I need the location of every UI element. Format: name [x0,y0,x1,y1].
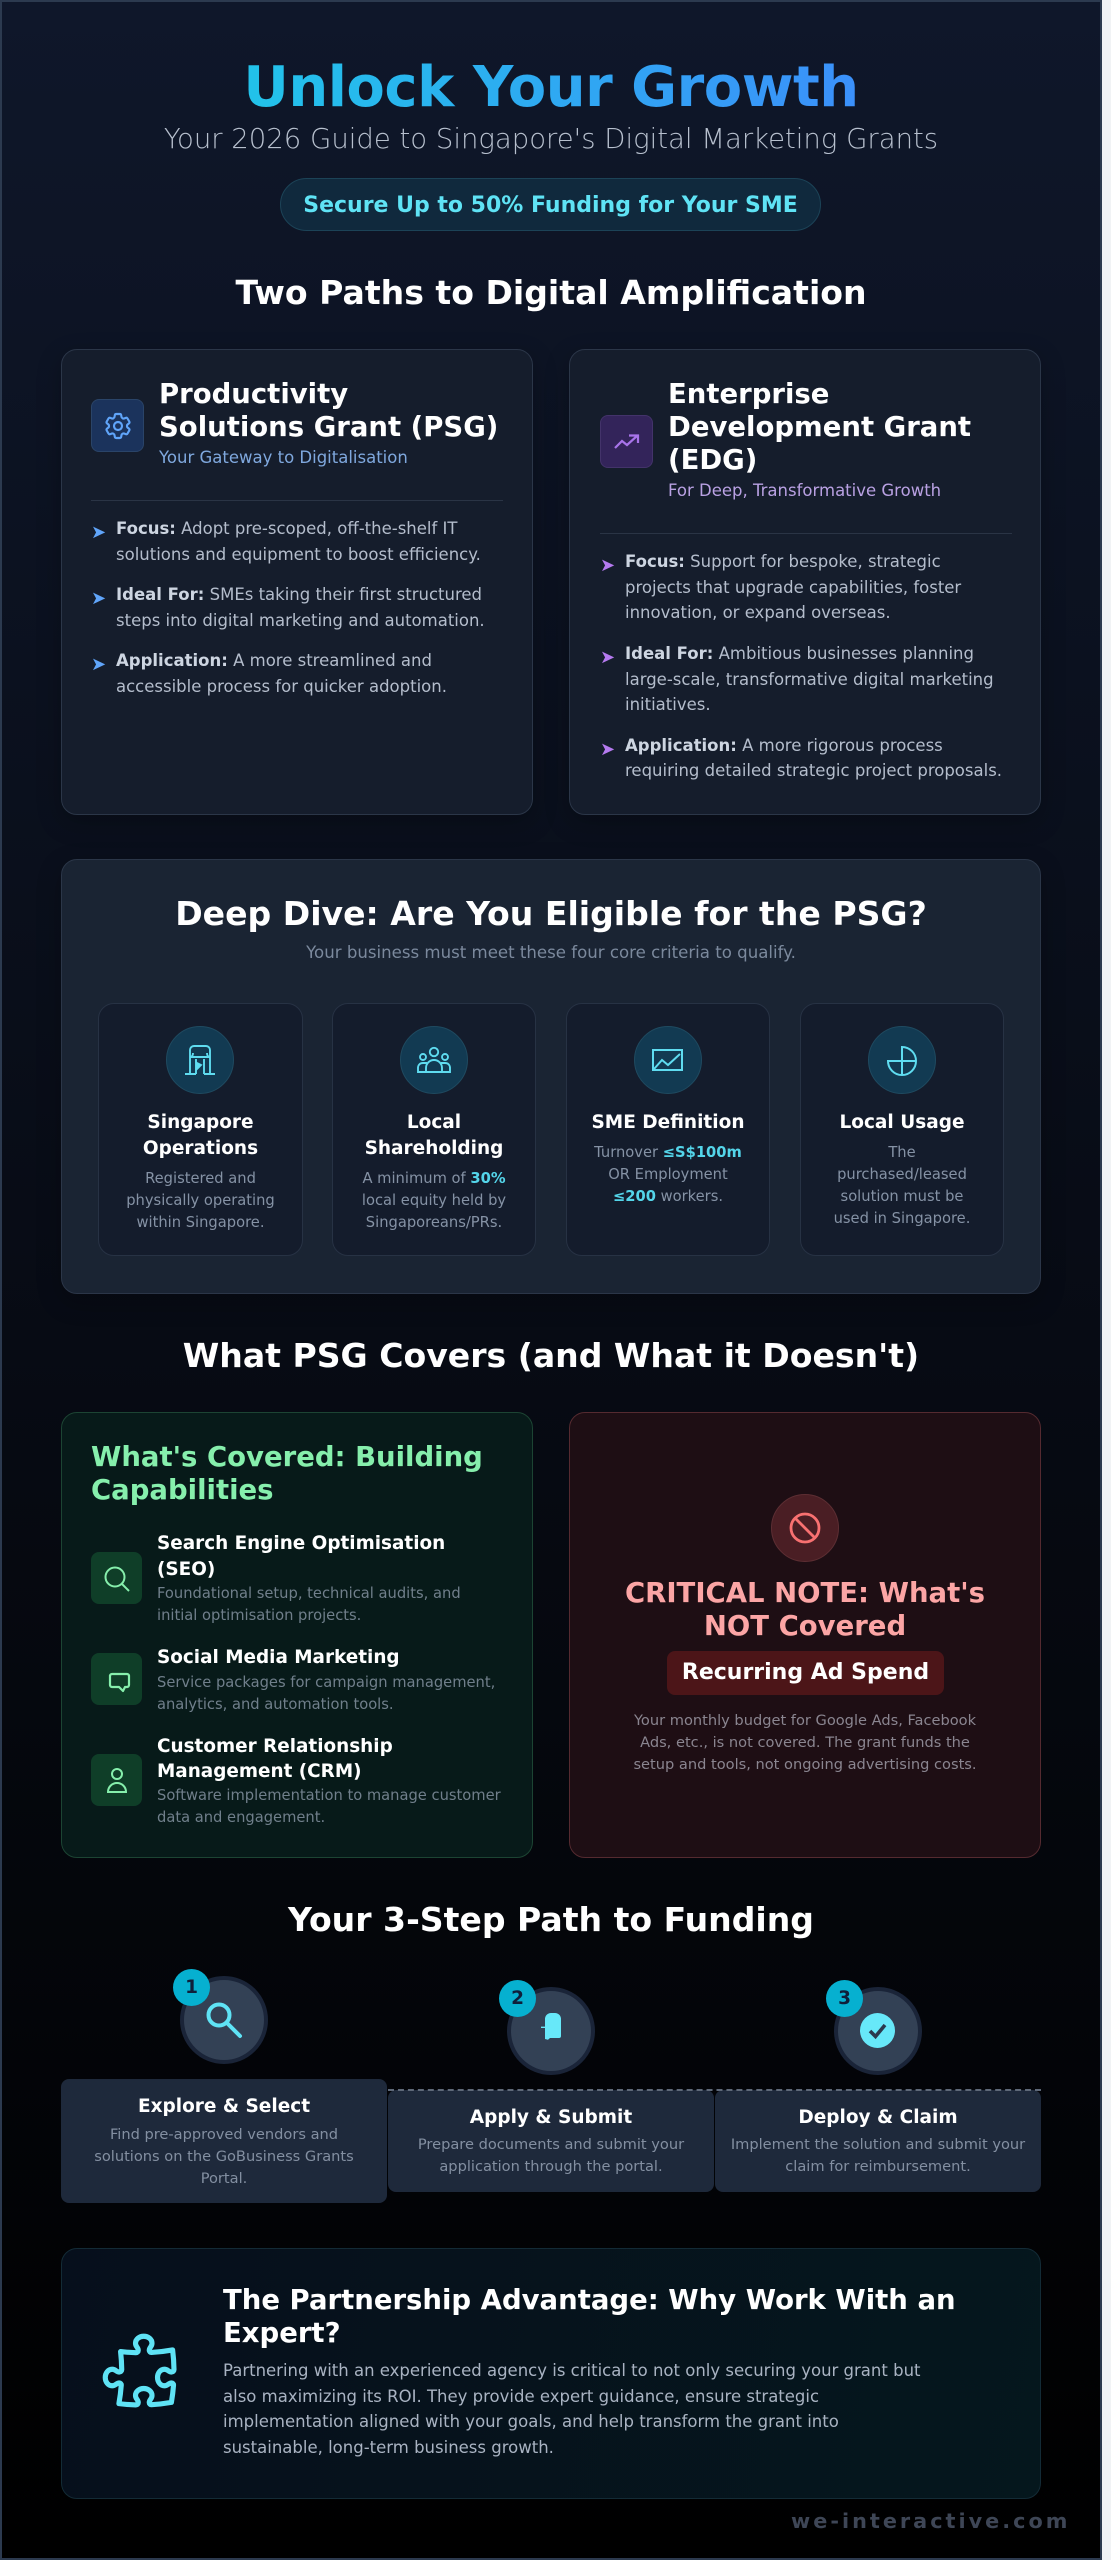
criterion: Local Usage [800,1003,1004,1256]
SMM description: analytics, and automation tools. [157,1696,394,1712]
EDG ideal for [600,644,994,714]
covered heading [91,1441,483,1506]
description: local equity held by [362,1192,506,1209]
step 3 description: claim for reimbursement. [785,2158,971,2175]
CRM description: Software implementation to manage customer [157,1787,501,1804]
funding pill: Secure Up to 50% Funding for Your SME [303,193,798,218]
EDG focus: ➤ [600,555,615,576]
heading: covers: What PSG Covers (and What it Doesn't) [183,1336,919,1375]
SEO description: initial optimisation projects. [157,1606,361,1624]
heading: two paths: Two Paths to Digital Amplification [235,273,867,312]
funding pill [280,178,821,231]
icon: puzzle piece [102,2334,177,2408]
covered heading: Capabilities [91,1474,274,1506]
partnership body [223,2361,920,2457]
SEO description [157,1584,461,1624]
not covered description: setup and tools, not ongoing advertising costs. [633,1756,977,1773]
description: OR Employment [608,1166,728,1183]
EDG focus [600,552,962,622]
description: physically operating [126,1192,275,1209]
EDG heading [668,378,971,476]
step 3 badge: 3 [838,1988,851,2009]
PSG application [91,651,447,696]
icon: people [400,1026,468,1094]
CRM title: Customer Relationship [157,1736,393,1757]
icon: gear [91,399,144,452]
EDG ideal for: large-scale, transformative digital marketing [625,670,994,689]
EDG application [600,736,1002,780]
PSG application: Application: A more streamlined and [116,651,432,670]
subtitle: Your 2026 Guide to Singapore's Digital Marketing Grants [164,123,938,155]
PSG focus [91,519,481,564]
EDG ideal for: Ideal For: Ambitious businesses planning [625,644,974,663]
criterion: Singapore Operations [98,1003,303,1256]
SEO title: Search Engine Optimisation [157,1533,445,1554]
EDG application: ➤ [600,739,615,760]
PSG tagline: Your Gateway to Digitalisation [159,448,408,467]
step 3 badge [826,1980,863,2017]
CRM description: data and engagement. [157,1809,325,1826]
title: Shareholding [365,1138,503,1159]
step 2 card [388,2090,714,2192]
EDG focus: innovation, or expand overseas. [625,603,891,622]
step 1 badge: 1 [185,1977,198,1998]
step 1 description [94,2126,354,2187]
PSG focus: Focus: Adopt pre-scoped, off-the-shelf IT [116,519,457,538]
description: ≤200 workers. [613,1188,723,1205]
panel: eligibility [61,859,1041,1294]
step 1 description: Portal. [201,2170,247,2187]
SMM description [157,1674,495,1712]
step 3 [715,1980,1041,2192]
step 2 description [418,2136,684,2175]
recurring ad spend badge: Recurring Ad Spend [682,1660,929,1685]
icon: search [91,1552,142,1604]
PSG focus: ➤ [91,522,106,543]
title: Unlock Your Growth [243,55,859,120]
partnership heading: The Partnership Advantage: Why Work With an [223,2284,956,2316]
step 3 title: Deploy & Claim [798,2106,958,2128]
EDG heading: Enterprise [668,378,829,410]
eligibility subheading: Your business must meet these four core criteria to qualify. [306,943,796,962]
title: Singapore [147,1112,254,1133]
description: purchased/leased [837,1166,967,1183]
step 3 circle with check icon [834,1987,922,2075]
not covered description: Ads, etc., is not covered. The grant funds the [640,1734,970,1751]
watermark: we-interactive.com [791,2509,1070,2533]
EDG application: Application: A more rigorous process [625,736,943,755]
EDG tagline: For Deep, Transformative Growth [668,481,941,500]
step 3 card [715,2090,1041,2192]
PSG focus: solutions and equipment to boost efficiency. [116,545,481,564]
EDG ideal for: ➤ [600,647,615,668]
title [365,1112,503,1159]
EDG ideal for: initiatives. [625,695,711,714]
step 1 description: Find pre-approved vendors and [110,2126,338,2143]
PSG ideal for: steps into digital marketing and automation. [116,611,485,630]
EDG focus: projects that upgrade capabilities, foster [625,578,961,597]
panel: partnership advantage [61,2248,1041,2499]
partnership body: sustainable, long-term business growth. [223,2438,554,2457]
eligibility heading: Deep Dive: Are You Eligible for the PSG? [175,894,927,933]
PSG application: accessible process for quicker adoption. [116,677,447,696]
SEO description: Foundational setup, technical audits, and [157,1584,461,1602]
partnership heading: Expert? [223,2316,341,2348]
step 2 badge: 2 [511,1988,524,2009]
title: Local [407,1112,461,1133]
step 3 description [731,2136,1026,2175]
step 2 title: Apply & Submit [470,2106,632,2128]
criterion: Local Shareholding [332,1003,536,1256]
recurring ad spend badge [667,1651,944,1695]
panel: EDG [569,349,1041,815]
steps timeline [61,1969,1041,2203]
title [143,1112,258,1159]
step 1 description: solutions on the GoBusiness Grants [94,2148,354,2165]
description [594,1144,742,1205]
icon: chat [91,1653,142,1705]
step 1 card [61,2079,387,2203]
not covered description [633,1712,977,1773]
CRM description [157,1787,501,1826]
SEO title [157,1533,445,1580]
icon: pie chart [868,1026,936,1094]
step 2 description: Prepare documents and submit your [418,2136,684,2153]
CRM title [157,1736,393,1782]
step 2 badge [499,1980,536,2017]
PSG heading: Productivity [159,378,348,410]
step 3 description: Implement the solution and submit your [731,2136,1025,2153]
EDG heading: (EDG) [668,444,757,476]
step 1 title: Explore & Select [138,2096,310,2117]
critical note heading: NOT Covered [704,1610,906,1642]
PSG ideal for [91,585,485,630]
icon: trend arrow [600,415,653,468]
description: The [888,1144,916,1161]
covered heading: What's Covered: Building [91,1441,483,1473]
criterion: SME Definition [566,1003,770,1256]
SMM title: Social Media Marketing [157,1647,400,1668]
description: Turnover ≤S$100m [594,1144,742,1161]
step 2 [388,1980,714,2192]
title: Operations [143,1138,258,1159]
partnership heading [223,2284,956,2348]
critical note heading: CRITICAL NOTE: What's [625,1577,985,1609]
description: A minimum of 30% [362,1170,506,1187]
PSG ideal for: ➤ [91,588,106,609]
description: Singaporeans/PRs. [366,1214,502,1231]
partnership body: also maximizing its ROI. They provide expert guidance, ensure strategic [223,2387,819,2406]
description: Registered and [145,1170,256,1187]
step 1 [61,1969,387,2203]
title: SME Definition [591,1112,744,1133]
icon: storefront [166,1026,234,1094]
EDG heading: Development Grant [668,411,971,443]
partnership body: implementation aligned with your goals, and help transform the grant into [223,2412,839,2431]
description: within Singapore. [136,1214,264,1231]
PSG heading: Solutions Grant (PSG) [159,411,498,443]
panel: not covered [569,1412,1041,1858]
step 1 circle with search icon [180,1976,268,2064]
SEO title: (SEO) [157,1559,215,1580]
not covered description: Your monthly budget for Google Ads, Facebook [634,1712,976,1729]
icon: prohibited [771,1494,839,1562]
step 2 description: application through the portal. [439,2158,663,2175]
description [834,1144,970,1227]
icon: person [91,1754,142,1806]
panel: covered [61,1412,533,1858]
step 1 badge [173,1969,210,2006]
critical note heading [625,1577,985,1642]
CRM title: Management (CRM) [157,1761,362,1782]
title: Local Usage [839,1112,965,1133]
description: solution must be [841,1188,963,1205]
EDG focus: Focus: Support for bespoke, strategic [625,552,941,571]
description [362,1170,506,1231]
description [126,1170,275,1231]
PSG application: ➤ [91,654,106,675]
heading: steps: Your 3-Step Path to Funding [288,1900,814,1939]
description: used in Singapore. [834,1210,970,1227]
icon: chart [634,1026,702,1094]
step 2 circle with icon [507,1987,595,2075]
panel: PSG [61,349,533,815]
SMM description: Service packages for campaign management, [157,1674,495,1690]
PSG ideal for: Ideal For: SMEs taking their first structured [116,585,482,604]
EDG application: requiring detailed strategic project proposals. [625,761,1002,780]
partnership body: Partnering with an experienced agency is critical to not only securing your grant but [223,2361,920,2380]
PSG heading [159,378,498,443]
